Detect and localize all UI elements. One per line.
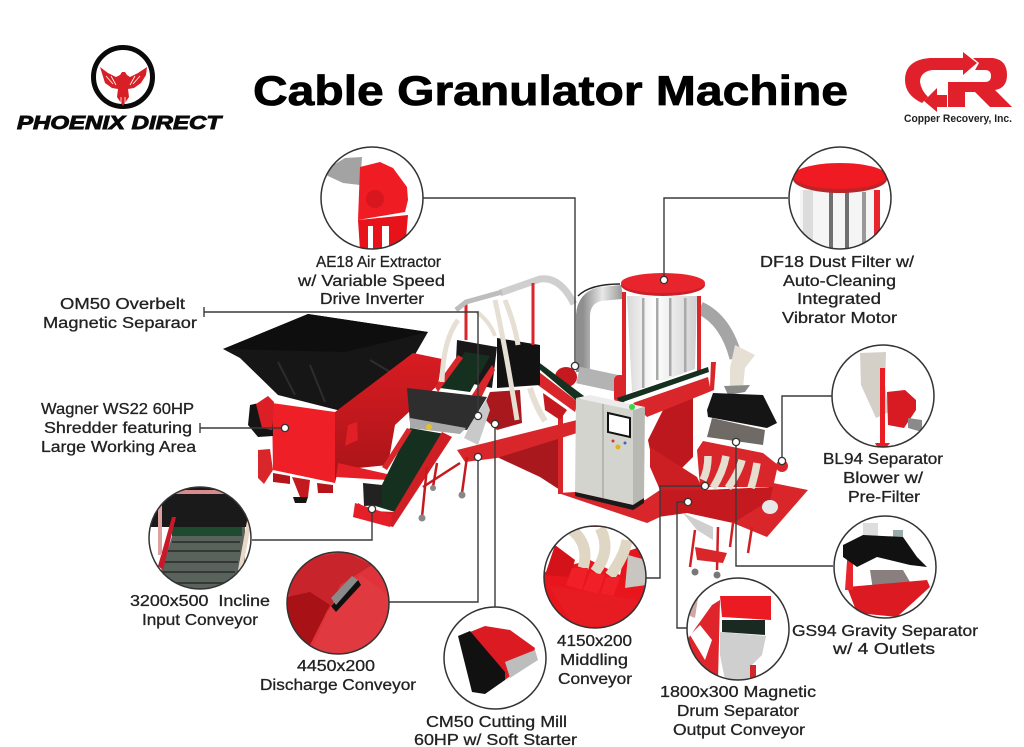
callout: middling conveyor — [544, 526, 646, 688]
label: 1800x300 Magnetic — [660, 684, 816, 701]
machine illustration — [223, 273, 808, 578]
callout: CM50 cutting mill — [414, 607, 578, 747]
callout dots — [281, 276, 786, 513]
label: CM50 Cutting Mill — [426, 714, 567, 731]
hopper — [223, 314, 428, 412]
icon: dust filter — [789, 147, 891, 255]
middling incline conveyor — [517, 352, 584, 421]
control cabinet — [575, 395, 645, 510]
label — [792, 623, 979, 658]
callout: magnetic drum separator — [660, 578, 816, 739]
hoses and overhead frame — [442, 283, 533, 420]
label: Integrated — [797, 291, 881, 308]
icon: magnetic drum separator close-up — [687, 578, 789, 685]
gravity separator — [697, 393, 788, 488]
label — [557, 633, 633, 688]
callout: Wagner WS22 shredder label — [41, 401, 196, 456]
label — [260, 658, 417, 694]
label: Pre-Filter — [848, 489, 921, 506]
callout: DF18 dust filter — [760, 147, 915, 327]
icon: CR arrows mark — [905, 52, 1012, 112]
label: 4150x200 — [557, 633, 632, 650]
label — [297, 254, 445, 308]
callout: GS94 gravity separator — [792, 516, 979, 658]
label: GS94 Gravity Separator — [792, 623, 979, 640]
icon: separator blower — [832, 345, 934, 448]
red tower behind cabinet — [648, 393, 693, 470]
overbelt magnet — [407, 388, 490, 445]
shredder — [248, 353, 442, 503]
label — [414, 714, 578, 747]
logo: Copper Recovery — [904, 52, 1012, 125]
label: Output Conveyor — [673, 722, 806, 739]
label: Middling — [560, 652, 628, 669]
right plate and separator base — [658, 483, 808, 578]
label: DF18 Dust Filter w/ — [760, 254, 915, 271]
icon: phoenix emblem — [94, 48, 152, 106]
callout: OM50 overbelt magnetic separator label: Magnetic Separaor — [43, 315, 198, 332]
icon: middling conveyor close-up — [544, 526, 646, 628]
label: AE18 Air Extractor — [316, 254, 442, 271]
label — [660, 684, 816, 739]
company name: Copper Recovery, Inc. — [904, 113, 1012, 125]
label: BL94 Separator — [823, 451, 944, 468]
icon: gravity separator — [834, 516, 936, 618]
icon: discharge conveyor close-up — [287, 552, 395, 655]
title: Cable Granulator Machine — [253, 67, 848, 114]
label: w/ 4 Outlets — [832, 641, 935, 658]
separator cyclone — [724, 345, 755, 395]
icon: air extractor — [321, 147, 423, 253]
label: Auto-Cleaning — [783, 273, 896, 290]
long red base frame — [457, 416, 703, 523]
label: Blower w/ — [843, 470, 924, 487]
label: 4450x200 — [297, 658, 375, 675]
icon: incline conveyor close-up — [149, 487, 252, 590]
label: Vibrator Motor — [782, 310, 898, 327]
callout: Wagner WS22 shredder label: Wagner WS22 60HP — [41, 401, 194, 418]
dust filter ducts — [500, 279, 736, 384]
logo: Phoenix Direct — [17, 48, 224, 133]
callout: BL94 separator blower — [823, 345, 944, 506]
callout: AE18 air extractor — [297, 147, 445, 308]
label: Conveyor — [558, 671, 633, 688]
callout: discharge conveyor — [260, 552, 417, 694]
input conveyor — [353, 428, 467, 527]
icon: cutting mill — [444, 607, 546, 709]
callout: input conveyor — [130, 487, 270, 629]
label — [823, 451, 944, 506]
callout: Wagner WS22 shredder label: Large Working Area — [41, 439, 196, 456]
callout: OM50 overbelt magnetic separator label: OM50 Overbelt — [60, 296, 186, 313]
callout: OM50 overbelt magnetic separator label — [43, 296, 198, 332]
dust filter — [614, 273, 705, 403]
label: 3200x500 Incline — [130, 593, 270, 610]
label: Drive Inverter — [320, 291, 425, 308]
callout: Wagner WS22 shredder label: Shredder featuring — [44, 420, 192, 437]
label: Drum Separator — [677, 703, 800, 720]
label: Input Conveyor — [142, 612, 259, 629]
label: Discharge Conveyor — [260, 677, 417, 694]
brand name: PHOENIX DIRECT — [17, 113, 224, 133]
top conveyor red beam — [617, 362, 716, 417]
label: w/ Variable Speed — [297, 273, 445, 290]
leader lines — [200, 198, 833, 628]
label — [130, 593, 270, 629]
discharge conveyor and black mill — [435, 338, 540, 430]
label — [760, 254, 915, 327]
